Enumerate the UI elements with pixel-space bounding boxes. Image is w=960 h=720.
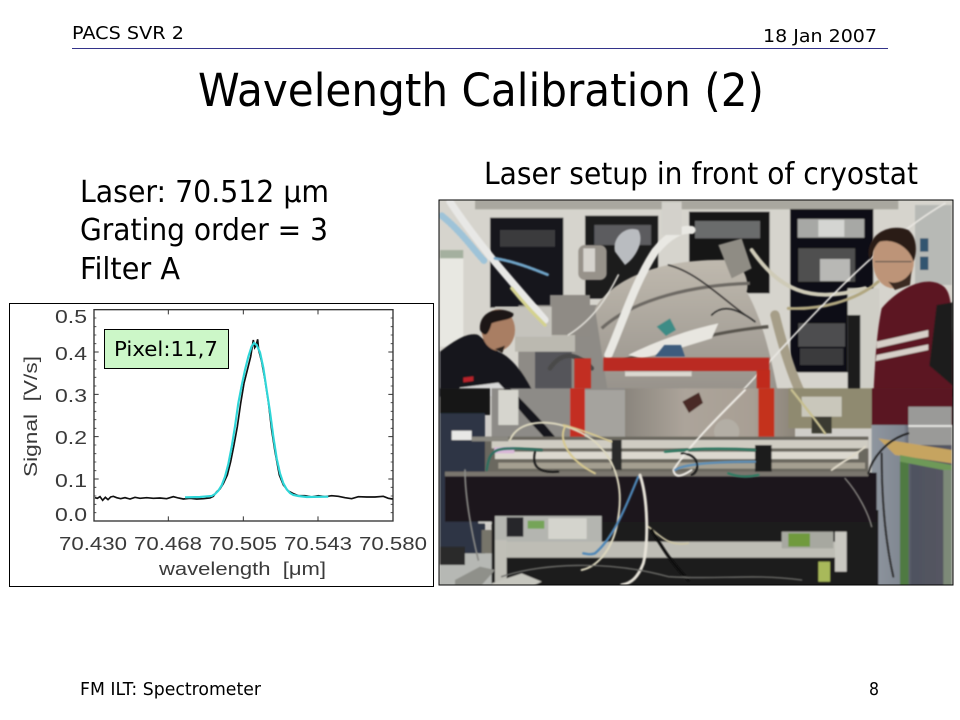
footer: page number: 8 bbox=[869, 679, 879, 700]
photo: laser setup in front of cryostat bbox=[439, 200, 953, 587]
pixel label: Pixel:11,7 bbox=[114, 337, 218, 361]
y axis labels bbox=[55, 307, 87, 525]
pixel label bbox=[104, 330, 228, 368]
header: document name: PACS SVR 2 bbox=[72, 23, 184, 44]
person left: dark hoodie bbox=[440, 309, 535, 397]
header rule bbox=[72, 48, 888, 49]
laser parameters text block: Filter A bbox=[80, 252, 180, 287]
red support frame bbox=[573, 344, 771, 390]
measured signal curve bbox=[95, 339, 393, 500]
title: Wavelength Calibration (2) bbox=[198, 64, 764, 117]
x axis labels bbox=[59, 534, 427, 554]
panel: spectrum chart bbox=[10, 304, 434, 586]
cryostat vessel bbox=[495, 202, 778, 397]
y axis labels: 0.3 bbox=[55, 386, 87, 406]
x axis labels: 70.468 bbox=[134, 534, 202, 554]
y axis labels: 0.0 bbox=[55, 505, 87, 525]
photo border bbox=[439, 200, 953, 585]
lower vessel, table, laser rail bbox=[440, 388, 953, 587]
y axis title: Signal [V/s] bbox=[21, 356, 41, 477]
table cables bbox=[465, 390, 908, 585]
y axis labels: 0.5 bbox=[55, 307, 87, 327]
y axis labels: 0.2 bbox=[55, 428, 87, 448]
x axis labels: 70.430 bbox=[59, 534, 127, 554]
x axis labels: 70.505 bbox=[209, 534, 277, 554]
header: date: 18 Jan 2007 bbox=[763, 26, 877, 47]
laser parameters text block bbox=[80, 175, 329, 287]
x axis labels: 70.543 bbox=[284, 534, 352, 554]
laser parameters text block: Grating order = 3 bbox=[80, 213, 328, 248]
y axis labels: 0.1 bbox=[55, 471, 87, 491]
photo caption: Laser setup in front of cryostat bbox=[484, 157, 918, 192]
person right: red sweater bbox=[868, 228, 953, 397]
cables and tubes bbox=[442, 202, 945, 395]
footer: section name: FM ILT: Spectrometer bbox=[80, 679, 262, 700]
laser parameters text block: Laser: 70.512 µm bbox=[80, 175, 329, 210]
gaussian fit curve bbox=[185, 343, 328, 497]
x axis title: wavelength [μm] bbox=[158, 559, 326, 579]
lab background wall and windows bbox=[440, 200, 953, 397]
background between hoodie and vessel bbox=[491, 387, 592, 438]
y axis labels: 0.4 bbox=[55, 344, 87, 364]
chart axes and ticks bbox=[94, 310, 393, 521]
x axis labels: 70.580 bbox=[359, 534, 427, 554]
